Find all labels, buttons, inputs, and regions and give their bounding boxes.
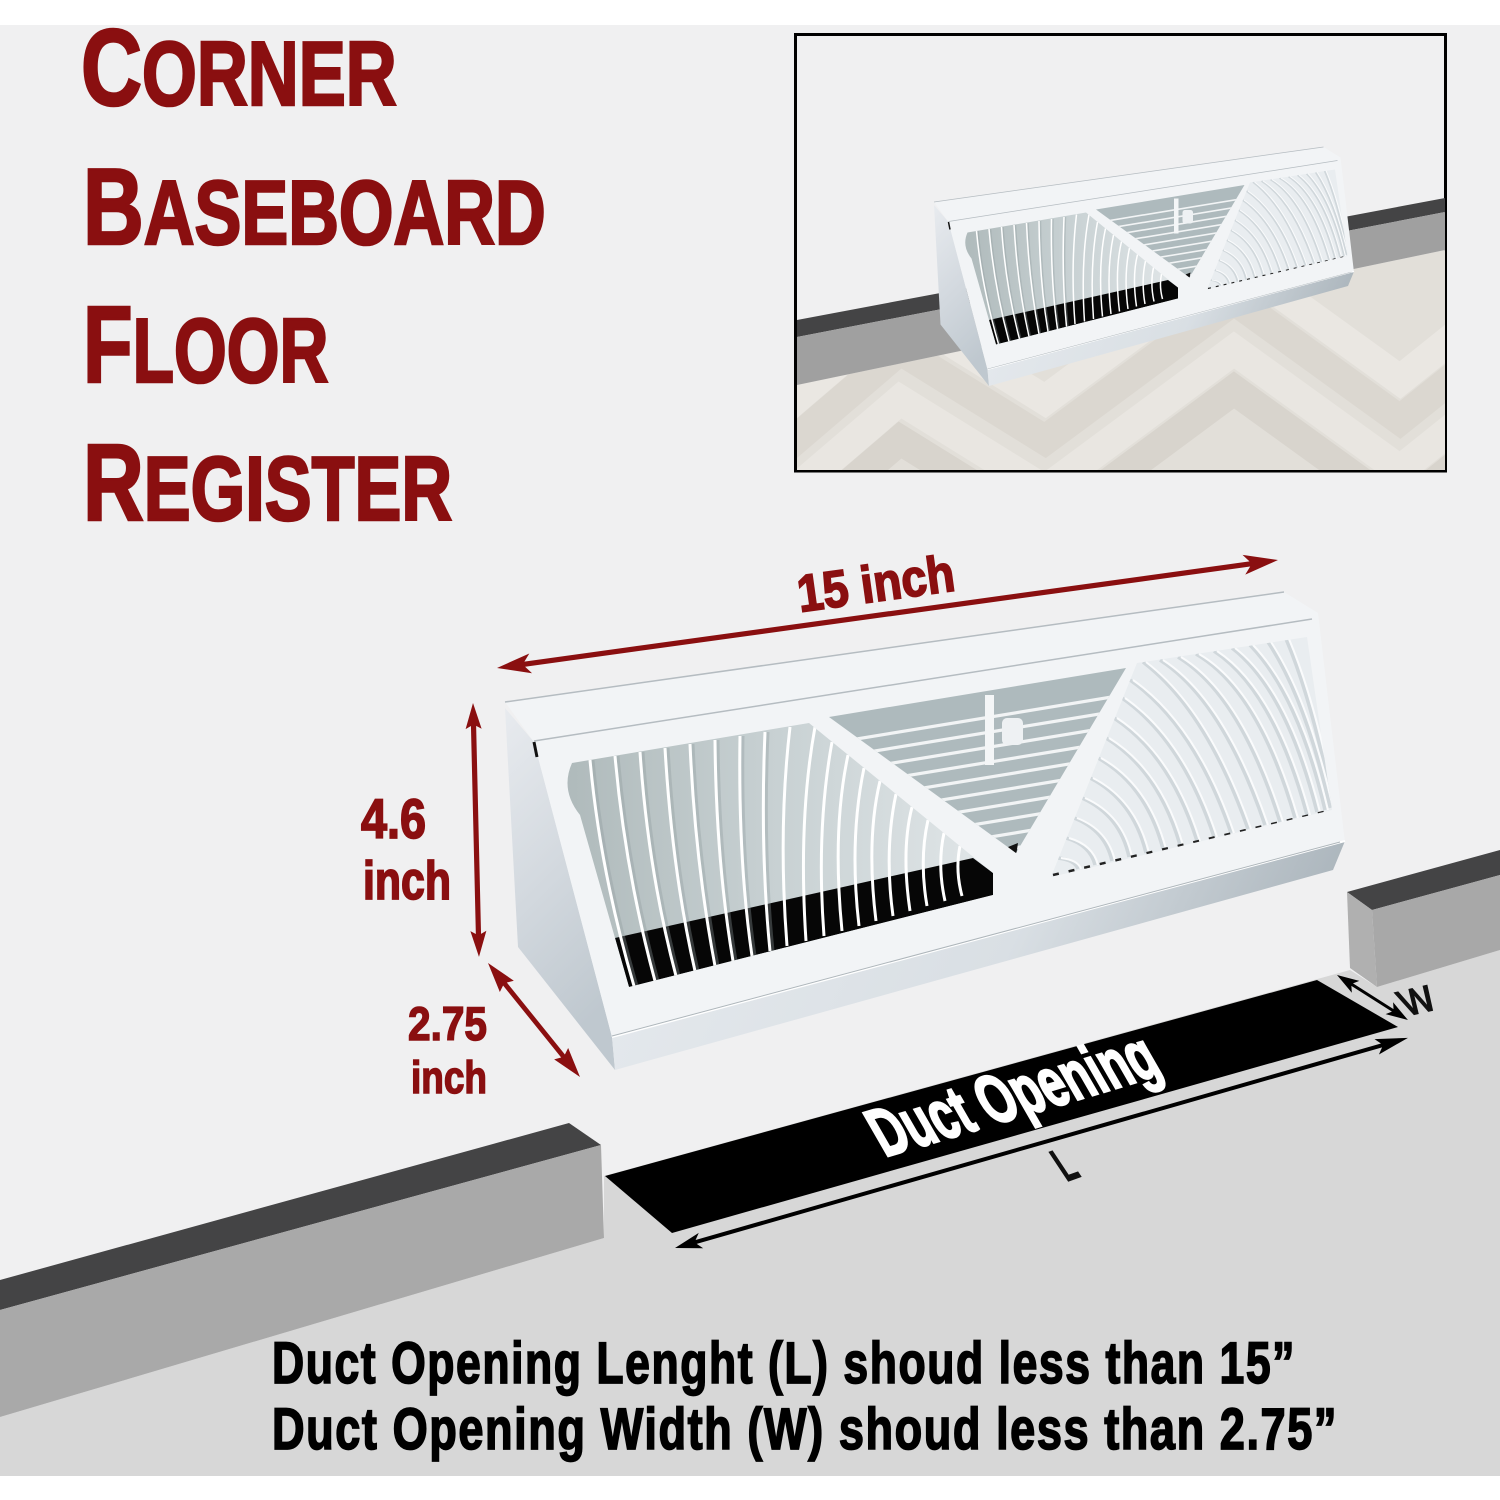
arrow: 4.6 inch height [465, 703, 487, 957]
right vent [1045, 630, 1340, 880]
duct opening [605, 980, 1398, 1233]
label: 4.6 inch [361, 787, 451, 911]
side panel [505, 708, 615, 1070]
centre triangular louvre [820, 660, 1130, 925]
floor [0, 950, 1500, 1476]
right baseboard [1347, 850, 1500, 987]
arrow: 15 inch length [496, 550, 1279, 678]
arrow: width W [1333, 969, 1412, 1026]
mounting tab [534, 742, 537, 757]
label: 2.75 inch: inch [411, 1052, 487, 1103]
damper stem [985, 695, 994, 765]
title: CORNER [81, 7, 397, 128]
title: BASEBOARD [83, 145, 546, 268]
arrow: length L [673, 1030, 1410, 1256]
front plate [505, 592, 1345, 1037]
bottom band [612, 841, 1345, 1070]
label: 4.6 inch: inch [363, 851, 451, 911]
damper knob [1002, 718, 1023, 745]
label: 2.75 inch [408, 997, 487, 1103]
label L: L [1043, 1140, 1087, 1190]
top edge lines [505, 592, 1312, 741]
left vent [555, 715, 1000, 995]
title: REGISTER [83, 421, 452, 544]
label: 4.6 inch: 4.6 [361, 787, 426, 850]
label: 2.75 inch: 2.75 [408, 997, 487, 1050]
inset baseboard [797, 198, 1445, 337]
panel: installed view inset [794, 33, 1447, 472]
label: 15 inch: 15 inch [794, 545, 958, 624]
left baseboard [0, 1123, 604, 1417]
title: FLOOR [83, 284, 328, 406]
title [81, 7, 546, 544]
main register product [505, 592, 1345, 1070]
arrow: 2.75 inch depth [481, 957, 587, 1083]
label W: W [1391, 978, 1444, 1023]
duct opening label: Duct Opening [853, 1018, 1173, 1171]
instruction text [272, 1331, 1338, 1462]
herringbone wood floor [797, 250, 1445, 470]
inset register [934, 147, 1354, 386]
